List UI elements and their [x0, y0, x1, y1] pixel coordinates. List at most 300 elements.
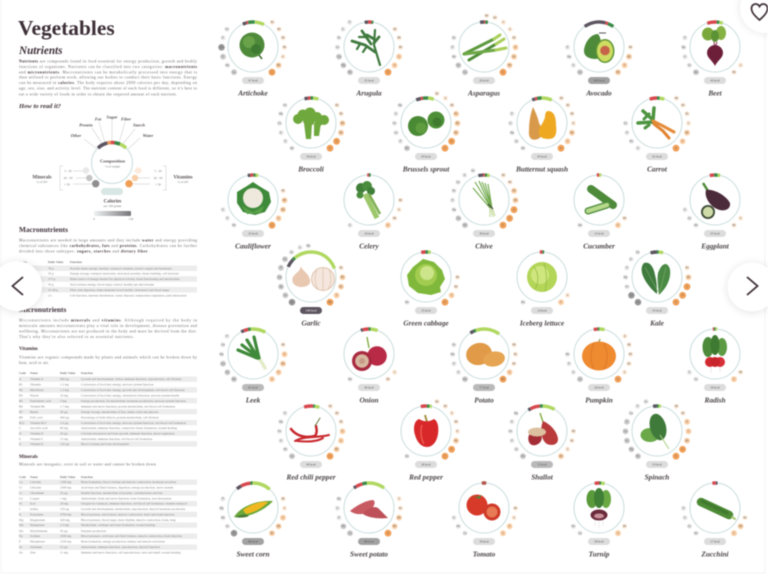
mineral dots	[681, 506, 698, 536]
table: minerals: Metabolism, cartilage and bone formation, wound healing	[81, 523, 155, 528]
vegetable: leek	[219, 320, 287, 404]
mineral dots: P	[511, 113, 513, 116]
mineral dots	[681, 35, 699, 75]
vitamin dots: B5	[502, 174, 506, 177]
vitamin dots: K	[740, 217, 742, 220]
mineral dots	[565, 45, 583, 75]
mineral dots	[277, 411, 295, 459]
vitamin dots: C	[502, 532, 504, 535]
vegetable: onion	[337, 322, 401, 404]
table: vitamins: Vitamin B12	[30, 421, 47, 425]
vitamin dots	[269, 342, 287, 382]
mineral dots: K	[511, 421, 513, 424]
vitamin dots: A	[340, 440, 342, 443]
mineral dots: P	[568, 363, 570, 366]
vegetable: beet	[681, 15, 747, 97]
vitamin dots: B9	[281, 363, 285, 366]
mineral dots	[623, 399, 648, 459]
table: vitamins: Pantothenic acid	[30, 399, 52, 403]
vitamin dots: B3	[512, 363, 516, 366]
mineral dots	[219, 496, 237, 536]
mineral dots: Mn	[348, 378, 352, 381]
table: minerals: Iodine	[30, 507, 39, 511]
calories pill: 41 kcal	[652, 154, 662, 158]
mineral dots: P	[683, 507, 685, 510]
mineral dots	[623, 250, 641, 306]
table: minerals: 11 mg	[60, 550, 68, 554]
legend diagram: per 100 grams	[104, 204, 122, 208]
vitamin dots: A	[513, 209, 515, 212]
mineral dots: Cu	[515, 448, 519, 451]
mineral dots: K	[453, 517, 455, 520]
table: macronutrients: Slow-release energy, blood sugar control, healthy gut microbiome	[70, 282, 155, 287]
vitamin dots: K	[278, 217, 280, 220]
vegetable: sweet corn	[218, 473, 288, 558]
mineral dots: P	[227, 217, 229, 220]
vitamin dots: C	[509, 217, 511, 220]
vitamin dots: C	[271, 224, 273, 227]
vitamin dots: B6	[328, 301, 332, 304]
table: minerals: K	[19, 512, 22, 516]
table: macronutrients: Sugar	[19, 277, 27, 281]
table: macronutrients: Daily Value	[48, 260, 64, 264]
mineral dots: Mn	[521, 455, 525, 458]
table: vitamins: 30 µg	[60, 410, 68, 414]
vitamin dots: B9	[454, 286, 458, 289]
icon: sweet corn	[234, 501, 273, 518]
vitamin dots: A	[284, 507, 286, 510]
table: minerals: 18 mg	[60, 502, 68, 506]
legend diagram: 0	[93, 217, 95, 221]
table: vitamins: 2.4 µg	[60, 421, 69, 425]
mineral dots: Zn	[645, 400, 648, 403]
table: minerals: Iron	[30, 502, 36, 506]
table: minerals: Cr	[19, 491, 23, 495]
mineral dots: Zn	[452, 37, 456, 40]
vitamin dots	[385, 198, 403, 228]
vitamin dots: A	[394, 64, 396, 67]
vitamin dots: B1	[339, 286, 343, 289]
vitamin dots: C	[567, 140, 569, 143]
table: macronutrients: Water	[19, 293, 27, 297]
mineral dots: Mn	[521, 301, 525, 304]
mineral dots: Mn	[521, 147, 525, 150]
vegetable: spinach	[623, 399, 691, 481]
table: vitamins: Vitamin D	[30, 432, 44, 436]
mineral dots: P	[626, 267, 628, 270]
table: minerals: Cl	[19, 486, 22, 490]
vitamin dots: B6	[732, 224, 736, 227]
heading: vitamins: Vitamins	[19, 347, 38, 352]
vegetable: avocado	[564, 12, 634, 97]
vitamin dots: B9	[732, 71, 736, 74]
table: vitamins: B7	[19, 410, 23, 414]
vitamin dots: A	[617, 378, 619, 381]
mineral dots: Fe	[452, 344, 456, 347]
calories pill: 28 kcal	[594, 540, 604, 544]
vitamin dots: K	[502, 224, 504, 227]
mineral dots: Mn	[284, 448, 288, 451]
calories pill: 40 kcal	[364, 386, 374, 390]
mineral dots: Mg	[451, 353, 455, 356]
vitamin dots: B5	[450, 104, 454, 107]
vitamin dots: A	[560, 147, 562, 150]
table: minerals: Blood pressure, blood sugar, heart rhythm, muscle contraction, brain, lung	[81, 518, 176, 523]
vitamin dots: B3	[335, 412, 339, 415]
text block: nutrients intro	[19, 60, 197, 96]
mineral dots	[450, 342, 468, 382]
legend diagram: Protein	[79, 122, 93, 128]
mineral dots: Mn	[290, 301, 294, 304]
mineral dots: Cu	[578, 378, 582, 381]
vitamin dots: B2	[681, 412, 685, 415]
vitamin dots: A	[567, 294, 569, 297]
mineral dots: Mg	[279, 113, 283, 116]
vitamin dots: B9	[685, 440, 689, 443]
mineral dots: K	[337, 507, 339, 510]
mineral dots: Mo	[578, 224, 582, 227]
vitamin dots: B5	[277, 28, 281, 31]
mineral dots: P	[637, 405, 639, 408]
vegetable: eggplant	[682, 170, 745, 250]
vitamin dots: B2	[627, 363, 631, 366]
vegetable: celery	[342, 173, 403, 250]
calories pill: 16 kcal	[710, 386, 720, 390]
table: minerals: Bone formation, energy production, kidney and muscle activation	[81, 540, 165, 545]
calories pill: 40 kcal	[306, 462, 316, 466]
name: Radish	[703, 395, 726, 404]
table: macronutrients: Name	[19, 260, 27, 264]
mineral dots: P	[222, 56, 224, 59]
table: minerals: Sodium	[30, 534, 40, 538]
table: vitamins: B9	[19, 415, 23, 419]
table: macronutrients: Cell function, nutrient distribution, waste disposal, temperature regulation, joint lubrication	[70, 293, 187, 298]
vegetable: tomato	[452, 481, 518, 558]
vitamin dots	[269, 188, 287, 229]
vitamin dots	[327, 404, 345, 460]
mineral dots: Mg	[220, 353, 224, 356]
mineral dots: Ca	[221, 344, 225, 347]
table: minerals: Mg	[19, 518, 24, 522]
mineral dots: K	[626, 421, 628, 424]
legend diagram: 150	[129, 217, 134, 221]
text block: micronutrients intro: That's why they're also referred to as essential nutrients.	[19, 335, 134, 339]
mineral dots: Fe	[226, 371, 229, 374]
name: Asparagus	[467, 88, 500, 97]
text block: macronutrients intro: divided into three subtypes: sugars, starches and dietary fiber.	[19, 249, 149, 253]
vitamin dots: B9	[393, 217, 397, 220]
icon: iceberg lettuce	[527, 262, 557, 292]
calories pill: 26 kcal	[594, 386, 604, 390]
mineral dots: Fe	[626, 440, 629, 443]
table: minerals: Phosphorus	[30, 540, 46, 544]
vegetable: carrot	[623, 92, 691, 173]
table: minerals: 2300 mg	[60, 534, 72, 538]
table: vitamins: Daily Value	[60, 371, 76, 375]
table: vitamins: A	[19, 377, 22, 381]
vitamin dots: B9	[513, 344, 516, 347]
mineral dots: Cu	[221, 363, 225, 366]
table: macronutrients: Main source of energy needed for physical activity, brain functioning and metabolism	[70, 277, 180, 282]
table: vitamins: C	[19, 426, 21, 430]
icon: red chili pepper	[291, 418, 329, 442]
icon: onion	[352, 337, 387, 371]
mineral dots: P	[284, 412, 286, 415]
calories pill: 26 kcal	[421, 462, 431, 466]
vitamin dots	[500, 342, 518, 383]
mineral dots: Mn	[290, 147, 294, 150]
vitamin dots	[434, 91, 460, 152]
mineral dots: Mg	[220, 507, 224, 510]
vitamin dots: A	[271, 378, 273, 381]
mineral dots: Mn	[636, 301, 640, 304]
vegetable: sweet potato	[334, 473, 404, 558]
mineral dots: Cu	[688, 525, 692, 528]
name: Garlic	[301, 318, 321, 327]
mineral dots: Mg	[624, 276, 628, 279]
mineral dots: P	[453, 363, 455, 366]
vitamin dots: A	[675, 147, 677, 150]
table: vitamins: 15 mg	[60, 437, 68, 441]
vegetable: artichoke	[218, 14, 287, 97]
icon: beet	[702, 26, 726, 66]
vitamin dots: C	[284, 353, 286, 356]
mineral dots: Mg	[682, 46, 686, 49]
mineral dots: P	[452, 199, 454, 202]
calories pill: 14 kcal	[537, 308, 547, 312]
text block: nutrients intro: Nutrients are compounds found in food essential for energy production, growth and bodily	[19, 60, 197, 64]
mineral dots: Cu	[394, 132, 398, 135]
table: minerals: Enzyme production	[81, 529, 106, 533]
name: Sweet corn	[236, 549, 270, 558]
mineral dots: K	[689, 371, 691, 374]
table: vitamins: Energy production, fat metabolism, hormone production, nervous system function	[81, 399, 186, 404]
vitamin dots: E	[573, 122, 575, 125]
table: minerals: Insulin function, metabolism of proteins, carbohydrates and fats	[81, 491, 163, 496]
table: minerals: Name	[30, 475, 38, 479]
table: minerals: Copper	[30, 496, 40, 500]
mineral dots	[682, 207, 698, 228]
name: Celery	[359, 241, 379, 250]
table: vitamins: Immune and nerve function, protein metabolism, red blood cell formation	[81, 404, 175, 410]
mineral dots: Mg	[510, 132, 514, 135]
icon: zucchini	[701, 501, 735, 519]
vitamin dots: B1	[686, 113, 689, 116]
calories pill: 17 kcal	[710, 540, 720, 544]
text block: micronutrients intro: miniscule amounts micronutrients play a vital role in development, disease prevention and	[19, 324, 197, 329]
vitamin dots: K	[278, 371, 280, 374]
mineral dots: Mg	[342, 64, 346, 67]
mineral dots	[277, 103, 294, 151]
vitamin dots: B6	[456, 276, 460, 279]
text block: minerals intro: Minerals are inorganic, exist in soil or water and cannot be broken down.	[19, 462, 157, 468]
vitamin dots: B5	[341, 122, 345, 125]
vitamin dots: B9	[675, 97, 679, 100]
mineral dots	[571, 524, 582, 536]
legend diagram: 5 - 20	[154, 169, 162, 173]
icon: brussels sprout	[408, 112, 444, 136]
vitamin dots: B5	[571, 113, 574, 116]
icon: pumpkin	[582, 339, 616, 370]
vitamin dots: B6	[570, 132, 574, 135]
table: vitamins: 5 mg	[60, 399, 67, 403]
table: minerals: 1 mg	[60, 496, 67, 500]
legend diagram: % of weight	[105, 164, 120, 168]
mineral dots: Mg	[226, 64, 230, 67]
table: minerals: Daily Value	[60, 475, 76, 479]
vitamin dots: C	[398, 498, 400, 501]
name: Beet	[707, 88, 723, 97]
table: minerals: 45 µg	[60, 529, 68, 533]
mineral dots: K	[395, 113, 397, 116]
vitamin dots: B1	[566, 104, 570, 107]
icon: broccoli	[293, 108, 329, 139]
vegetable: zucchini	[681, 481, 748, 558]
table: vitamins: Name	[30, 371, 38, 375]
mineral dots	[450, 35, 468, 75]
table: minerals: Se	[19, 545, 23, 549]
vitamin dots: E	[457, 430, 459, 433]
vitamin dots	[269, 20, 287, 76]
mineral dots: Fe	[452, 190, 456, 193]
legend diagram: > 50	[64, 182, 70, 186]
vitamin dots: B3	[282, 37, 285, 40]
vitamin dots	[615, 334, 633, 383]
vitamin dots: B6	[282, 498, 285, 501]
vitamin dots: B3	[435, 400, 439, 403]
vegetable: red pepper	[396, 399, 460, 481]
mineral dots: Fe	[284, 258, 287, 261]
name: Tomato	[473, 549, 496, 558]
calories pill: 25 kcal	[248, 232, 258, 236]
table: macronutrients: 50 g	[48, 282, 54, 286]
mineral dots: Mg	[307, 245, 311, 248]
vitamin dots: C	[509, 371, 511, 374]
button: favourite heart	[739, 0, 768, 34]
mineral dots: Mn	[342, 525, 346, 528]
mineral dots: Ca	[456, 181, 460, 184]
vitamin dots: K	[387, 71, 389, 74]
icon: celery	[356, 181, 380, 218]
icon: asparagus	[464, 35, 506, 60]
vitamin dots: K	[675, 455, 677, 458]
text block: nutrients intro: age, sex, size, and activity level. The nutrient content of each food is different, so it's best to	[19, 87, 197, 92]
mineral dots: Mg	[630, 448, 634, 451]
legend diagram: % of DV	[177, 180, 189, 184]
legend diagram: Fat	[95, 116, 102, 122]
table: vitamins: Vitamin A	[30, 377, 44, 381]
heading: minerals: Minerals	[19, 455, 38, 460]
mineral dots: Mn	[348, 71, 352, 74]
vegetable: shallot	[507, 396, 577, 481]
icon: shallot	[528, 413, 558, 445]
table: vitamins: 120 µg	[60, 442, 69, 446]
mineral dots: Mn	[452, 56, 456, 59]
calories pill: 34 kcal	[306, 154, 316, 158]
vitamin dots	[500, 506, 518, 536]
mineral dots: P	[280, 267, 282, 270]
text block: vitamins intro: heat, acid or air.	[19, 361, 49, 366]
vitamin dots	[500, 173, 518, 229]
vitamin dots	[558, 429, 576, 459]
vitamin dots	[327, 103, 345, 152]
mineral dots: K	[573, 371, 575, 374]
table: minerals: Ca	[19, 480, 23, 484]
mineral dots	[508, 411, 526, 459]
vitamin dots: C	[394, 371, 396, 374]
icon: cauliflower	[237, 182, 271, 215]
mineral dots	[277, 243, 311, 306]
vitamin dots: B9	[514, 199, 518, 202]
vitamin dots: B9	[281, 209, 285, 212]
table: minerals: Chromium	[30, 491, 44, 495]
vitamin dots: B9	[572, 430, 576, 433]
table: macronutrients: Fat	[19, 266, 23, 270]
name: Potato	[474, 395, 494, 404]
mineral dots: K	[280, 132, 282, 135]
vegetable: arugula	[335, 18, 403, 97]
mineral dots: P	[452, 46, 454, 49]
vitamin dots: C	[733, 378, 735, 381]
mineral dots: K	[630, 258, 632, 261]
vitamin dots: C	[617, 532, 619, 535]
table: vitamins: Percentage of birth defects, protein metabolism, cell division	[81, 415, 159, 420]
vitamin dots: B6	[456, 122, 460, 125]
vitamin dots: B5	[398, 37, 401, 40]
vegetable: iceberg lettuce	[515, 250, 570, 327]
table: minerals: Molybdenum	[30, 529, 48, 533]
text block: nutrients intro: functions of organisms. Nutrients can be classified into two categories: macronutrients	[19, 65, 197, 69]
mineral dots: Cu	[226, 525, 230, 528]
legend diagram: Vitamins	[173, 176, 193, 180]
table: minerals: Antioxidant, immune function, reproduction, thyroid function	[81, 545, 160, 550]
mineral dots: Ca	[337, 56, 341, 59]
mineral dots: Mn	[694, 224, 698, 227]
mineral dots: K	[573, 64, 575, 67]
table: vitamins	[19, 371, 197, 447]
table: minerals: Antioxidant, brain and nerve function, bone formation, iron absorption	[81, 496, 172, 501]
mineral dots: K	[280, 440, 282, 443]
icon: arugula	[352, 30, 380, 65]
icon: eggplant	[701, 183, 730, 219]
text block: nutrients intro: and micronutrients. Macronutrients can be metabolically processed into energy that is	[19, 70, 197, 74]
table: macronutrients: 25-38 g	[48, 288, 58, 292]
table: minerals: Zinc	[30, 550, 36, 554]
mineral dots: Fe	[509, 430, 513, 433]
table: macronutrients: Function	[70, 260, 82, 264]
mineral dots: Mn	[220, 46, 224, 49]
vitamin dots: B1	[514, 353, 518, 356]
vitamin dots: B9	[339, 132, 343, 135]
vitamin dots: C	[444, 455, 446, 458]
table: minerals: 1300 mg	[60, 480, 72, 484]
mineral dots: K	[342, 28, 344, 31]
text block: macronutrients intro	[19, 238, 198, 253]
legend diagram: % of DV	[36, 180, 48, 184]
legend diagram: Water	[143, 133, 154, 138]
mineral dots: K	[510, 122, 512, 125]
legend diagram: > 50	[155, 182, 161, 186]
vitamin dots: B9	[277, 64, 281, 67]
vitamin dots: B6	[283, 199, 287, 202]
vitamin dots: C	[444, 147, 446, 150]
mineral dots	[687, 370, 698, 382]
calories pill: 43 kcal	[421, 154, 431, 158]
table: vitamins: Conversion of food into energy, nervous system function	[81, 382, 154, 388]
mineral dots: K	[222, 37, 224, 40]
vitamin dots: B9	[399, 46, 403, 49]
table: macronutrients: 275 g	[48, 277, 56, 281]
